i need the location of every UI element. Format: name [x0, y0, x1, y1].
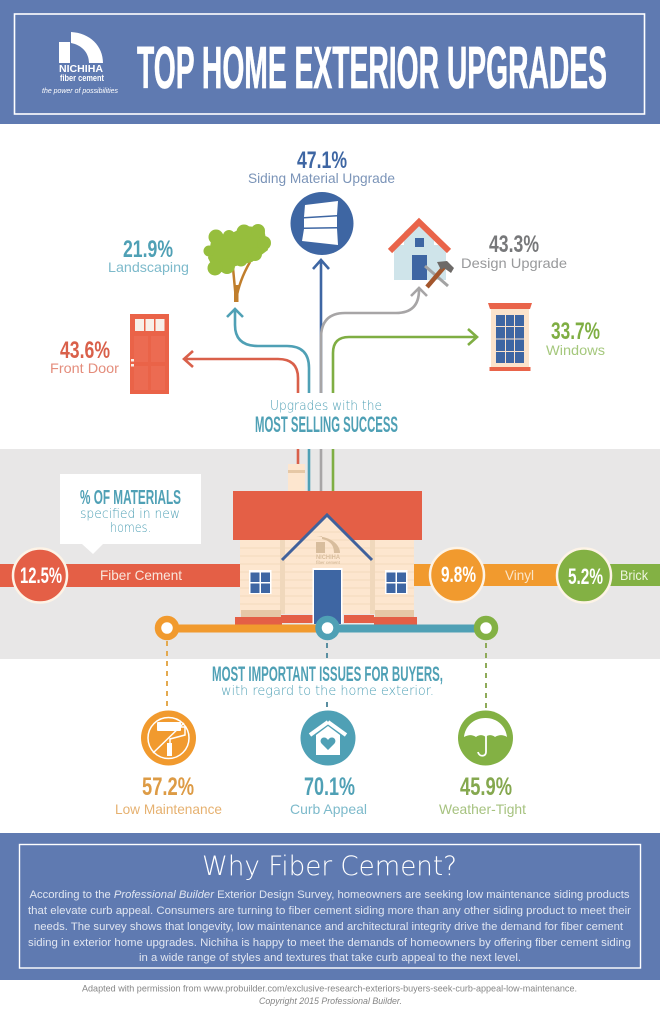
callout: percent of materials: homes.	[110, 521, 151, 536]
arrow: front door	[184, 351, 298, 393]
arrow: siding	[313, 260, 329, 393]
issue: weather-tight	[439, 710, 526, 817]
icon: siding	[290, 192, 354, 255]
issue: curb appeal: 70.1%	[304, 773, 355, 801]
bar: vinyl: Vinyl	[505, 567, 534, 583]
panel body text: siding in exterior home upgrades. Nichiha is happy to meet the demands of homeowners by offering fiber cement siding	[28, 937, 631, 949]
icon: door	[130, 314, 169, 394]
logo on gable: fiber cement	[316, 560, 340, 565]
panel heading: Why Fiber Cement?	[202, 851, 457, 882]
icon: house with heart	[300, 710, 356, 766]
heading: upgrades with the most selling success: MOST SELLING SUCCESS	[255, 412, 398, 437]
panel body text: that elevate curb appeal. Consumers are turning to fiber cement siding more than any other siding product to meet their	[28, 905, 631, 917]
bar: brick: 5.2%	[568, 564, 603, 589]
panel body text	[28, 889, 631, 964]
stat: front door: 43.6%	[60, 337, 110, 364]
logo: Nichiha fiber cement: the power of possibilities	[42, 88, 118, 95]
stat: design upgrade: Design Upgrade	[461, 255, 567, 271]
issue: curb appeal: Curb Appeal	[290, 801, 367, 817]
heading: most important issues: MOST IMPORTANT ISSUES FOR BUYERS,	[212, 663, 443, 686]
arrow: landscaping	[227, 309, 309, 393]
heading: most important issues	[212, 663, 443, 699]
logo on gable	[316, 536, 341, 565]
issue: low maintenance: Low Maintenance	[115, 801, 222, 817]
front door	[312, 568, 342, 624]
stat: landscaping: 21.9%	[123, 236, 173, 263]
heading: upgrades with the most selling success	[255, 399, 398, 437]
footer credit	[82, 984, 577, 1007]
callout: percent of materials: % OF MATERIALS	[80, 487, 181, 509]
stat: windows: Windows	[546, 342, 605, 358]
bar: vinyl: 9.8%	[441, 562, 476, 587]
callout: percent of materials: specified in new	[80, 507, 180, 522]
footer credit: Copyright 2015 Professional Builder.	[259, 996, 402, 1007]
callout: percent of materials	[60, 474, 201, 554]
connector lines into house	[298, 449, 333, 491]
logo: Nichiha fiber cement: NICHIHA	[59, 64, 103, 75]
stat: siding material upgrade	[248, 147, 395, 255]
bar: brick: Brick	[620, 567, 649, 583]
bar: vinyl	[414, 548, 560, 602]
timeline: buyer issues connector	[158, 619, 495, 708]
panel body text: needs. The survey shows that longevity, low maintenance and architectural integrity drive the demand for fiber cement	[34, 921, 623, 933]
stat: landscaping	[108, 236, 189, 275]
footer credit: Adapted with permission from www.probuilder.com/exclusive-research-exteriors-buyers-seek-curb-appeal-low-maintenance.	[82, 984, 577, 994]
panel body text: in a wide range of styles and textures that take curb appeal to the next level.	[139, 952, 521, 964]
stat: front door: Front Door	[50, 360, 119, 376]
heading: upgrades with the most selling success: Upgrades with the	[270, 399, 382, 414]
stat: landscaping: Landscaping	[108, 259, 189, 275]
heading: most important issues: with regard to the home exterior.	[221, 684, 434, 699]
icon: tree	[204, 224, 271, 302]
icon: paint roller	[141, 710, 196, 766]
icon: umbrella	[458, 710, 513, 766]
logo: Nichiha fiber cement: fiber cement	[60, 73, 105, 84]
stat: windows: 33.7%	[551, 318, 600, 345]
logo: Nichiha fiber cement	[42, 32, 118, 95]
stat: design upgrade	[461, 231, 567, 271]
arrow: design	[321, 288, 427, 393]
left window	[249, 570, 272, 594]
stat: siding material upgrade: Siding Material Upgrade	[248, 170, 395, 186]
issue: low maintenance: 57.2%	[142, 773, 194, 801]
header banner	[0, 0, 660, 124]
illustration: house	[233, 464, 422, 625]
arrows: upgrades	[184, 260, 477, 393]
icon: house with tools	[390, 219, 454, 287]
issue: low maintenance	[115, 710, 222, 817]
right window	[385, 570, 408, 594]
issue: weather-tight: Weather-Tight	[439, 801, 526, 817]
bar: fiber cement	[0, 548, 241, 602]
issue: weather-tight: 45.9%	[460, 773, 512, 801]
stat: design upgrade: 43.3%	[489, 231, 539, 258]
stat: windows	[546, 318, 605, 358]
gray band	[0, 449, 660, 659]
bar: fiber cement: Fiber Cement	[100, 567, 182, 583]
icon: window	[488, 303, 532, 371]
panel body text: According to the Professional Builder Exterior Design Survey, homeowners are seeking low maintenance siding products	[30, 889, 630, 901]
stat: siding material upgrade: 47.1%	[297, 147, 347, 174]
bar: brick	[557, 548, 660, 602]
issue: curb appeal	[290, 710, 367, 817]
panel: why fiber cement	[0, 833, 660, 980]
stat: front door	[50, 337, 119, 376]
logo on gable: NICHIHA	[316, 555, 341, 561]
arrow: windows	[333, 329, 477, 393]
bar: fiber cement: 12.5%	[20, 563, 62, 588]
